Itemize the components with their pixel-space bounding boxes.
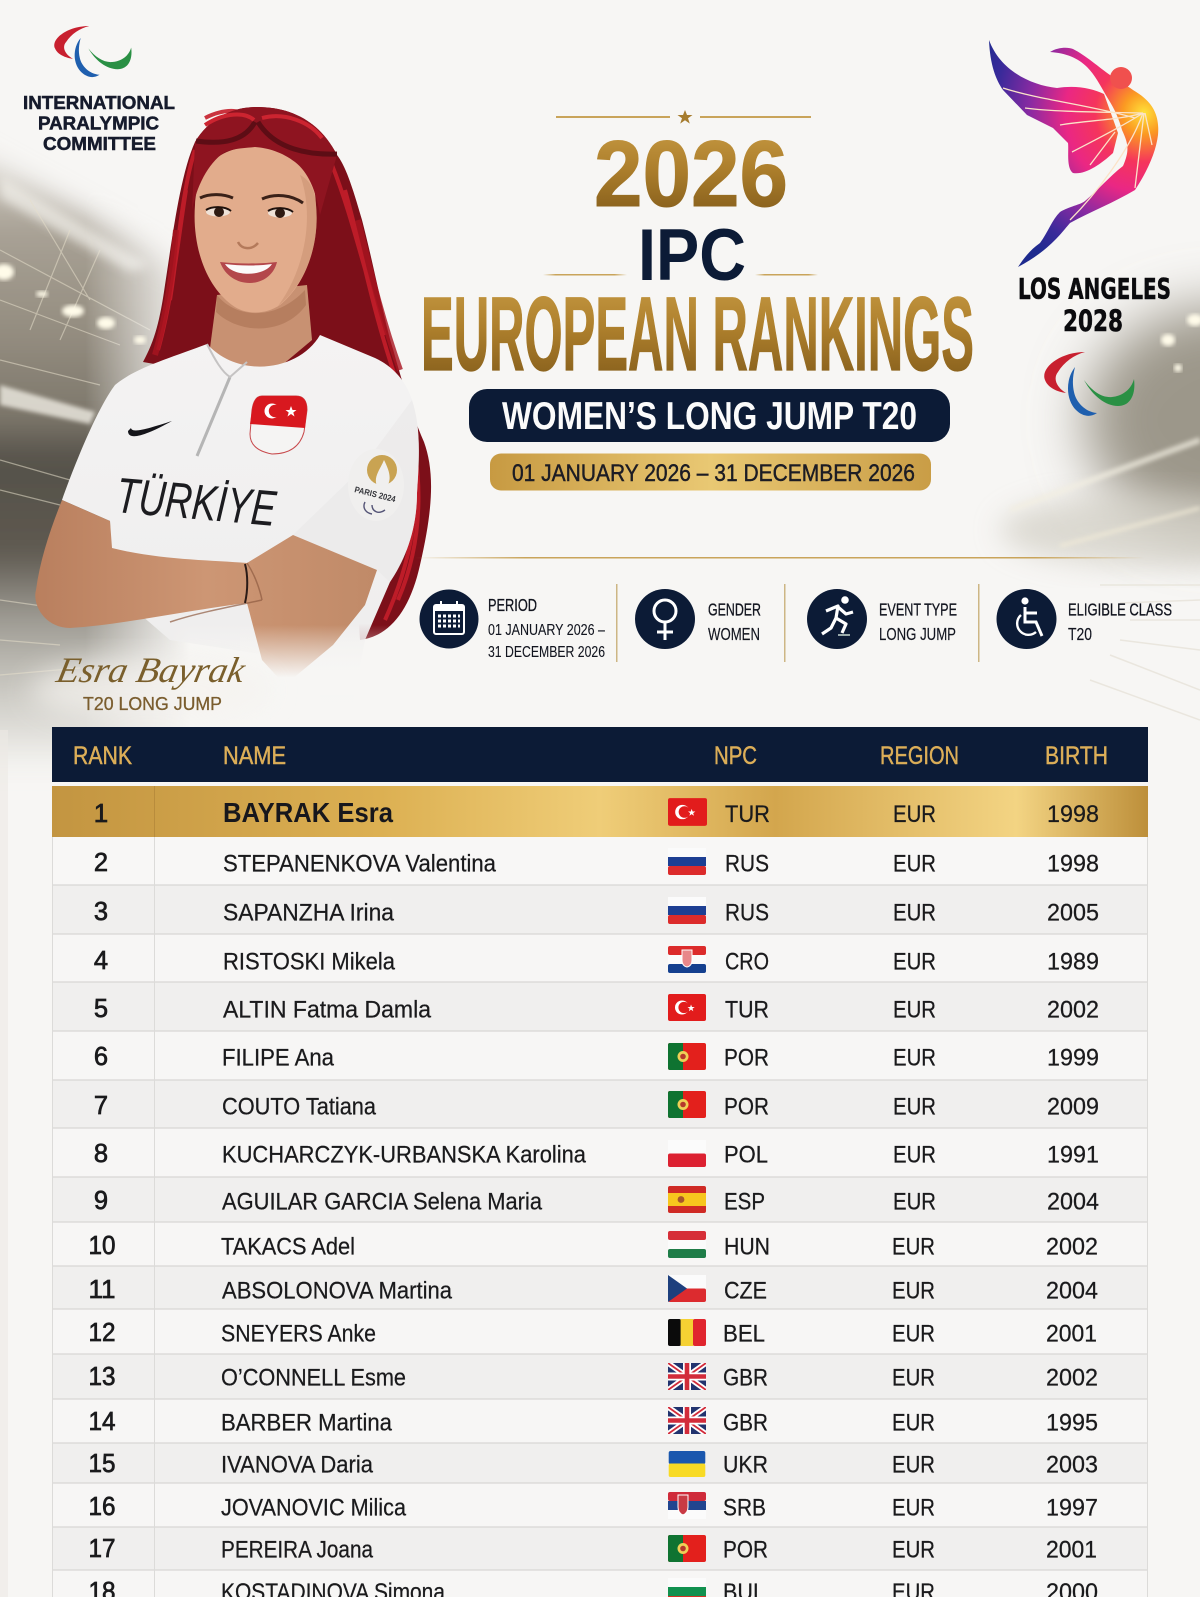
row 15: 15 xyxy=(88,1450,116,1478)
icon: calendar xyxy=(420,590,478,648)
row 14: EUR xyxy=(892,1410,935,1436)
flag: Turkey xyxy=(668,798,707,826)
row 11: 11 xyxy=(88,1276,116,1304)
row 15: 2003 xyxy=(1046,1452,1098,1478)
row 8: EUR xyxy=(893,1142,936,1168)
row 13: 2002 xyxy=(1046,1364,1098,1392)
flag: Hungary xyxy=(668,1231,706,1258)
row 7 xyxy=(94,1091,1099,1120)
athlete event caption: T20 LONG JUMP xyxy=(83,693,222,714)
row 2: RUS xyxy=(725,850,769,878)
rankings table xyxy=(52,727,1148,1597)
info: period: 31 DECEMBER 2026 xyxy=(488,644,605,661)
sleeve badge: Paris 2024 xyxy=(348,449,404,521)
row 1 highlighted: EUR xyxy=(893,801,936,828)
row 12 xyxy=(88,1319,1097,1348)
row 17 xyxy=(88,1535,1097,1564)
title rules xyxy=(543,274,818,276)
row 13: GBR xyxy=(723,1364,768,1392)
logo text: PARALYMPIC xyxy=(38,114,159,134)
info: event type xyxy=(807,589,957,649)
row 12: SNEYERS Anke xyxy=(221,1320,376,1348)
icon: agitos xyxy=(54,26,132,77)
row 17: 17 xyxy=(88,1535,116,1563)
info strip xyxy=(420,584,1172,662)
row 4 xyxy=(94,946,1099,976)
row 12: EUR xyxy=(892,1320,935,1348)
row 1 highlighted xyxy=(52,786,1148,837)
row 14: BARBER Martina xyxy=(221,1410,392,1436)
flag: Portugal xyxy=(668,1535,706,1562)
row 5: 5 xyxy=(94,995,108,1023)
row 7: POR xyxy=(724,1094,769,1120)
title block xyxy=(421,110,974,490)
row 16: EUR xyxy=(892,1494,935,1522)
info: gender: GENDER xyxy=(708,600,761,620)
flag: Great Britain xyxy=(668,1363,706,1390)
flag: Ukraine xyxy=(669,1451,705,1477)
row 9 xyxy=(94,1186,1099,1216)
event pill xyxy=(469,389,950,442)
row 11: 2004 xyxy=(1046,1278,1098,1304)
LA text xyxy=(1018,273,1171,338)
year: 2026 xyxy=(594,121,788,226)
row 11: ABSOLONOVA Martina xyxy=(222,1278,452,1304)
row 18 xyxy=(88,1578,1098,1597)
row 13: 13 xyxy=(88,1363,116,1391)
row 5: TUR xyxy=(725,996,769,1024)
table header: REGION xyxy=(880,743,959,770)
row 5: EUR xyxy=(893,996,936,1024)
flag: Russia xyxy=(668,897,706,924)
flag: Bulgaria xyxy=(668,1578,706,1597)
row backgrounds xyxy=(52,837,1148,1597)
flag: Poland xyxy=(668,1140,706,1167)
row 3: 3 xyxy=(94,898,108,926)
row 5 xyxy=(94,994,1099,1024)
logo text: INTERNATIONAL xyxy=(23,93,175,113)
row 4: 1989 xyxy=(1047,948,1099,976)
row 9: ESP xyxy=(724,1188,765,1216)
row 4: CRO xyxy=(725,948,769,976)
row 14 xyxy=(88,1407,1098,1436)
info: event type: EVENT TYPE xyxy=(879,600,957,620)
row 17: POR xyxy=(723,1536,768,1564)
row 3: RUS xyxy=(725,900,769,926)
smile xyxy=(220,262,277,283)
row 3: EUR xyxy=(893,900,936,926)
row 1 highlighted: 1 xyxy=(94,798,108,828)
signature: Esra Bayrak: Esra Bayrak xyxy=(52,650,250,690)
event pill: WOMEN’S LONG JUMP T20 xyxy=(502,395,917,438)
row 1 highlighted: 1998 xyxy=(1047,801,1099,828)
flag: Czechia xyxy=(668,1275,706,1302)
row 8: KUCHARCZYK-URBANSKA Karolina xyxy=(222,1142,586,1168)
hair highlights xyxy=(158,111,418,620)
stadium: left stands xyxy=(0,156,179,760)
row 14: 14 xyxy=(88,1408,116,1436)
sleeve badge: Paris 2024: PARIS 2024 xyxy=(354,484,397,504)
athlete portrait xyxy=(30,107,431,722)
row 17: PEREIRA Joana xyxy=(221,1536,373,1564)
row 9: 2004 xyxy=(1047,1188,1099,1216)
row 2: 1998 xyxy=(1047,850,1099,878)
row 7: 2009 xyxy=(1047,1094,1099,1120)
row 6: FILIPE Ana xyxy=(222,1044,334,1072)
info: gender xyxy=(635,589,761,649)
logo: International Paralympic Committee xyxy=(23,26,175,154)
row 9: EUR xyxy=(893,1188,936,1216)
row 3 xyxy=(94,897,1099,926)
table header: NPC xyxy=(714,743,757,770)
shirt xyxy=(62,335,419,720)
row 4: EUR xyxy=(893,948,936,976)
row 11 xyxy=(88,1275,1098,1304)
row 6: 6 xyxy=(94,1043,108,1071)
row 16: SRB xyxy=(723,1494,766,1522)
info: gender: WOMEN xyxy=(708,624,760,644)
row 7: COUTO Tatiana xyxy=(222,1094,376,1120)
flag: Belgium xyxy=(668,1319,706,1346)
hair back xyxy=(143,107,431,640)
info: eligible class xyxy=(996,589,1172,649)
icon: agitos xyxy=(1044,352,1134,416)
row 15: EUR xyxy=(892,1452,935,1478)
flag: Serbia xyxy=(668,1492,706,1519)
row 10: TAKACS Adel xyxy=(221,1234,355,1260)
row 4: 4 xyxy=(94,947,108,975)
row 13: EUR xyxy=(892,1364,935,1392)
hair front xyxy=(192,107,337,215)
row 6: POR xyxy=(724,1044,769,1072)
row 12: BEL xyxy=(723,1320,765,1348)
info: period xyxy=(420,590,605,661)
date pill xyxy=(490,454,931,490)
row 2: STEPANENKOVA Valentina xyxy=(223,850,496,878)
info: period: PERIOD xyxy=(488,595,537,615)
row 12: 2001 xyxy=(1046,1320,1097,1348)
row 13 xyxy=(88,1363,1098,1392)
row 15 xyxy=(88,1450,1098,1478)
row 10: 2002 xyxy=(1046,1234,1098,1260)
row 6 xyxy=(94,1043,1099,1072)
row 3: SAPANZHA Irina xyxy=(223,900,394,926)
row 1 highlighted: BAYRAK Esra xyxy=(223,797,394,828)
row 12: 12 xyxy=(88,1319,116,1347)
LA text: 2028 xyxy=(1063,304,1123,338)
row 14: GBR xyxy=(723,1410,768,1436)
row 15: UKR xyxy=(723,1452,768,1478)
row 10 xyxy=(88,1231,1098,1260)
flag: Croatia xyxy=(668,946,706,973)
icon: swoosh xyxy=(128,421,172,436)
row 7: EUR xyxy=(893,1094,936,1120)
row 16: 16 xyxy=(88,1493,116,1521)
row 9: AGUILAR GARCIA Selena Maria xyxy=(222,1188,542,1216)
crossed arms xyxy=(35,500,377,685)
row 8: 8 xyxy=(94,1140,108,1168)
flag: Portugal xyxy=(668,1043,706,1070)
row 1 highlighted: TUR xyxy=(725,801,770,828)
flag: Great Britain xyxy=(668,1407,706,1434)
row 10: EUR xyxy=(892,1234,935,1260)
info: period: 01 JANUARY 2026 – xyxy=(488,622,605,639)
row 2: 2 xyxy=(94,849,108,877)
table header: BIRTH xyxy=(1045,743,1108,770)
star ornament xyxy=(556,110,811,124)
flag: Russia xyxy=(668,848,706,875)
icon: winged figure xyxy=(989,40,1158,267)
row 2: EUR xyxy=(893,850,936,878)
chest badge xyxy=(250,396,307,454)
date pill: 01 JANUARY 2026 – 31 DECEMBER 2026 xyxy=(512,460,915,487)
table header: NAME xyxy=(223,743,286,770)
row 8 xyxy=(94,1140,1099,1168)
icon: wheelchair xyxy=(996,589,1056,649)
table header: RANK xyxy=(73,743,132,770)
row 8: POL xyxy=(724,1142,768,1168)
row 2 xyxy=(94,848,1099,878)
stadium: right stands xyxy=(1000,305,1200,720)
row 14: 1995 xyxy=(1046,1410,1098,1436)
icon: female sign xyxy=(635,589,695,649)
flag: Spain xyxy=(668,1186,706,1213)
neck xyxy=(210,285,312,392)
row 16: JOVANOVIC Milica xyxy=(221,1494,406,1522)
row 16: 1997 xyxy=(1046,1494,1098,1522)
row 17: EUR xyxy=(892,1536,935,1564)
row 17: 2001 xyxy=(1046,1536,1097,1564)
shirt text: TÜRKİYE xyxy=(114,467,279,537)
row 7: 7 xyxy=(94,1092,108,1120)
row 3: 2005 xyxy=(1047,900,1099,926)
row 11: CZE xyxy=(724,1278,767,1304)
row 15: IVANOVA Daria xyxy=(221,1452,373,1478)
row 9: 9 xyxy=(94,1187,108,1215)
logo text: COMMITTEE xyxy=(43,134,156,154)
row 13: O’CONNELL Esme xyxy=(221,1364,406,1392)
row 5: ALTIN Fatma Damla xyxy=(223,996,431,1024)
table header xyxy=(52,727,1148,782)
eyes and brows xyxy=(200,195,303,203)
logo text xyxy=(23,93,175,154)
IPC: IPC xyxy=(638,215,746,296)
row 8: 1991 xyxy=(1047,1142,1099,1168)
flag: Portugal xyxy=(668,1091,706,1118)
flag: Turkey xyxy=(668,994,706,1021)
row 5: 2002 xyxy=(1047,996,1099,1024)
row 4: RISTOSKI Mikela xyxy=(223,948,395,976)
row 10: HUN xyxy=(724,1234,770,1260)
row 6: 1999 xyxy=(1047,1044,1099,1072)
row 10: 10 xyxy=(88,1232,116,1260)
row 16 xyxy=(88,1492,1098,1522)
row 6: EUR xyxy=(893,1044,936,1072)
face xyxy=(195,146,317,312)
info: event type: LONG JUMP xyxy=(879,624,956,644)
info: eligible class: T20 xyxy=(1068,624,1092,644)
row 11: EUR xyxy=(892,1278,935,1304)
icon: runner xyxy=(807,589,867,649)
logo: Los Angeles 2028 xyxy=(989,40,1171,416)
